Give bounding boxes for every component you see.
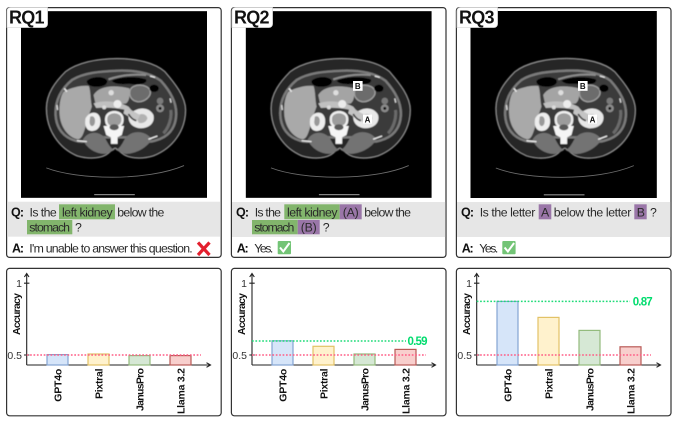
bar chart: RQ3 accuracy: Accuracy	[461, 293, 473, 335]
bar chart: RQ2 accuracy: Llama 3.2	[400, 368, 412, 414]
bar chart: RQ2 accuracy: GPT4o	[278, 369, 290, 402]
bar chart: RQ2 accuracy: 0.5	[232, 350, 247, 362]
tag: RQ2: RQ2	[234, 7, 270, 27]
answer: A:	[462, 241, 474, 255]
answer	[237, 241, 291, 255]
bar chart: RQ2 accuracy: 0.59	[408, 336, 428, 348]
bar chart: RQ3 accuracy	[456, 268, 671, 416]
question band: Q:	[11, 206, 24, 220]
question band: stomach	[29, 220, 70, 234]
question band: left kidney	[62, 206, 114, 220]
question band	[232, 202, 445, 237]
CT scan image with markers: B	[355, 82, 361, 91]
bar chart: RQ2 accuracy: Pixtral	[318, 368, 330, 399]
bar chart: RQ3 accuracy: 1	[466, 278, 472, 290]
bar chart: RQ3 accuracy: 0.87	[633, 296, 653, 308]
question band: ?	[650, 206, 657, 220]
CT scan image	[21, 11, 207, 198]
question band: Is the	[255, 206, 281, 220]
question band: B	[637, 206, 645, 220]
answer: A:	[12, 241, 24, 255]
icon: green check	[502, 241, 516, 254]
question band	[457, 202, 670, 237]
bar chart: RQ2 accuracy	[231, 268, 446, 416]
bar chart: RQ2 accuracy: 1	[241, 278, 247, 290]
answer: Yes.	[479, 241, 498, 255]
icon: red cross	[198, 242, 210, 255]
panel: RQ1 question	[7, 7, 221, 257]
answer: A:	[237, 241, 249, 255]
CT scan image with markers	[246, 11, 432, 198]
question band: stomach	[254, 220, 294, 234]
CT scan image with markers	[470, 11, 657, 198]
bar chart: RQ1 accuracy: Accuracy	[11, 293, 23, 335]
bar chart: RQ1 accuracy	[7, 268, 221, 416]
question band: A	[541, 206, 550, 220]
bar chart: RQ1 accuracy: Llama 3.2	[176, 368, 188, 414]
bar chart: RQ1 accuracy: Pixtral	[94, 368, 106, 399]
answer	[462, 241, 516, 255]
bar chart: RQ1 accuracy: JanusPro	[134, 368, 146, 411]
bar chart: RQ2 accuracy: JanusPro	[360, 368, 372, 411]
answer: I'm unable to answer this question.	[29, 241, 193, 255]
question band: Is the	[30, 206, 57, 220]
CT scan image with markers: B	[580, 82, 586, 91]
panel: RQ2 question	[231, 7, 446, 257]
bar chart: RQ3 accuracy: Pixtral	[544, 368, 556, 399]
question band: Q:	[236, 206, 249, 220]
CT scan image with markers: A	[590, 115, 596, 124]
question band: ?	[323, 220, 330, 234]
question band: (B)	[301, 220, 317, 234]
bar chart: RQ3 accuracy: Llama 3.2	[626, 368, 638, 414]
question band	[7, 202, 221, 237]
question band: (A)	[343, 206, 359, 220]
bar chart: RQ1 accuracy: GPT4o	[52, 369, 64, 402]
CT scan image with markers: A	[365, 115, 371, 124]
question band: below the	[117, 206, 164, 220]
tag: RQ3: RQ3	[459, 7, 494, 27]
question band: below the letter	[554, 206, 631, 220]
bar chart: RQ1 accuracy: 1	[16, 278, 22, 290]
bar chart: RQ3 accuracy: GPT4o	[502, 369, 514, 402]
question band: Q:	[461, 206, 474, 220]
icon: green check	[278, 241, 291, 254]
tag: RQ1: RQ1	[9, 7, 44, 27]
bar chart: RQ3 accuracy: 0.5	[457, 350, 472, 362]
answer: Yes.	[254, 241, 273, 255]
question band: Is the letter	[480, 206, 535, 220]
question band: left kidney	[287, 206, 338, 220]
question band: ?	[75, 220, 82, 234]
bar chart: RQ1 accuracy: 0.5	[7, 350, 22, 362]
bar chart: RQ2 accuracy: Accuracy	[236, 293, 248, 335]
panel: RQ3 question	[456, 7, 671, 257]
bar chart: RQ3 accuracy: JanusPro	[584, 368, 596, 411]
question band: below the	[364, 206, 411, 220]
